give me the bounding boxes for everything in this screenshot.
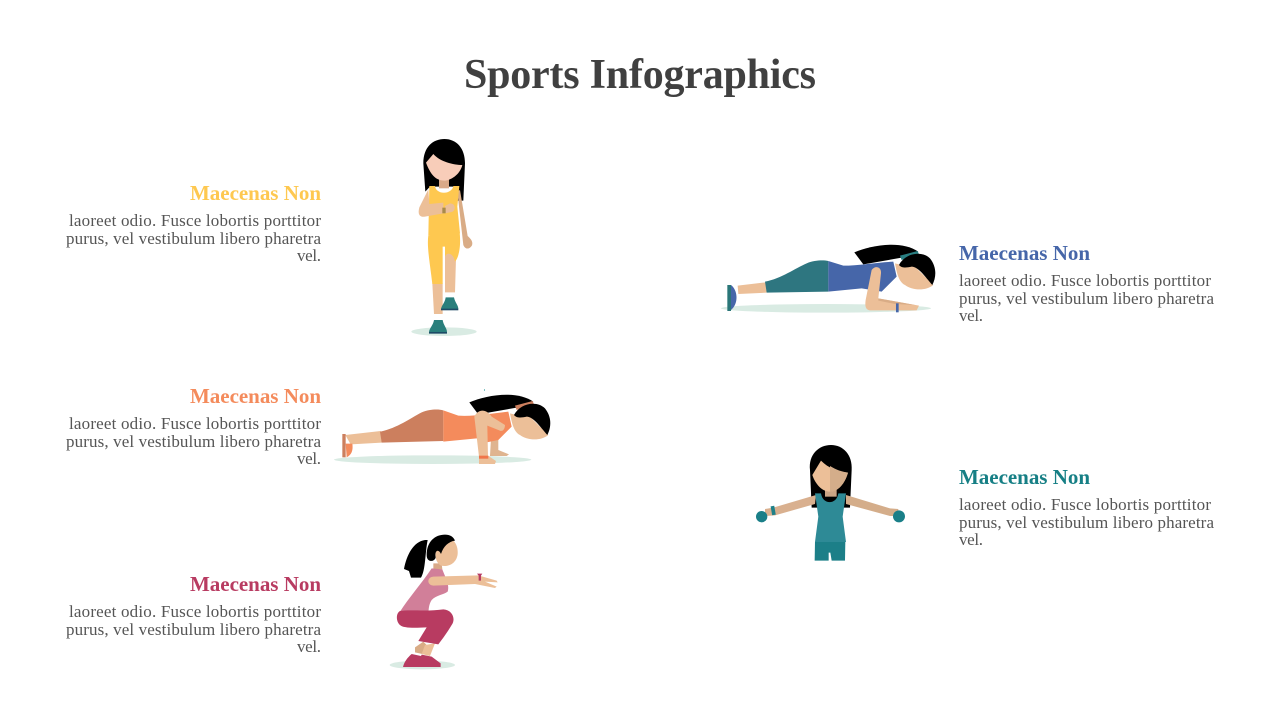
text block: orange left: laoreet odio. Fusce lobortis porttitor	[69, 414, 321, 433]
text block: yellow left: Maecenas Non	[190, 181, 321, 205]
text block: blue right: purus, vel vestibulum libero pharetra	[959, 289, 1214, 308]
text block: crimson left: purus, vel vestibulum libero pharetra	[66, 620, 321, 639]
text block: teal right: Maecenas Non	[959, 465, 1090, 489]
text block: crimson left: Maecenas Non	[190, 572, 321, 596]
figure: plank in blue	[721, 245, 935, 313]
text block: crimson left: vel.	[297, 637, 321, 656]
text block: crimson left	[66, 572, 321, 656]
text block: crimson left: laoreet odio. Fusce lobortis porttitor	[69, 602, 321, 621]
text block: blue right: vel.	[959, 306, 983, 325]
text block: blue right: Maecenas Non	[959, 241, 1090, 265]
text block: orange left: purus, vel vestibulum libero pharetra	[66, 432, 321, 451]
text block: blue right: laoreet odio. Fusce lobortis porttitor	[959, 271, 1211, 290]
title: Sports Infographics	[464, 52, 816, 98]
figure: squat in crimson	[390, 535, 498, 669]
text block: teal right	[959, 465, 1214, 549]
text block: yellow left: laoreet odio. Fusce lobortis porttitor	[69, 211, 321, 230]
text block: orange left: Maecenas Non	[190, 384, 321, 408]
figure: runner in yellow	[411, 139, 477, 336]
text block: blue right	[959, 241, 1214, 325]
text block: teal right: laoreet odio. Fusce lobortis porttitor	[959, 495, 1211, 514]
text block: teal right: vel.	[959, 530, 983, 549]
text block: teal right: purus, vel vestibulum libero pharetra	[959, 513, 1214, 532]
figure: push-up in orange	[334, 389, 550, 464]
text block: orange left	[66, 384, 321, 468]
text block: yellow left: purus, vel vestibulum libero pharetra	[66, 229, 321, 248]
figure: dumbbell raise in teal	[756, 445, 905, 561]
text block: yellow left	[66, 181, 321, 265]
text block: orange left: vel.	[297, 449, 321, 468]
text block: yellow left: vel.	[297, 246, 321, 265]
